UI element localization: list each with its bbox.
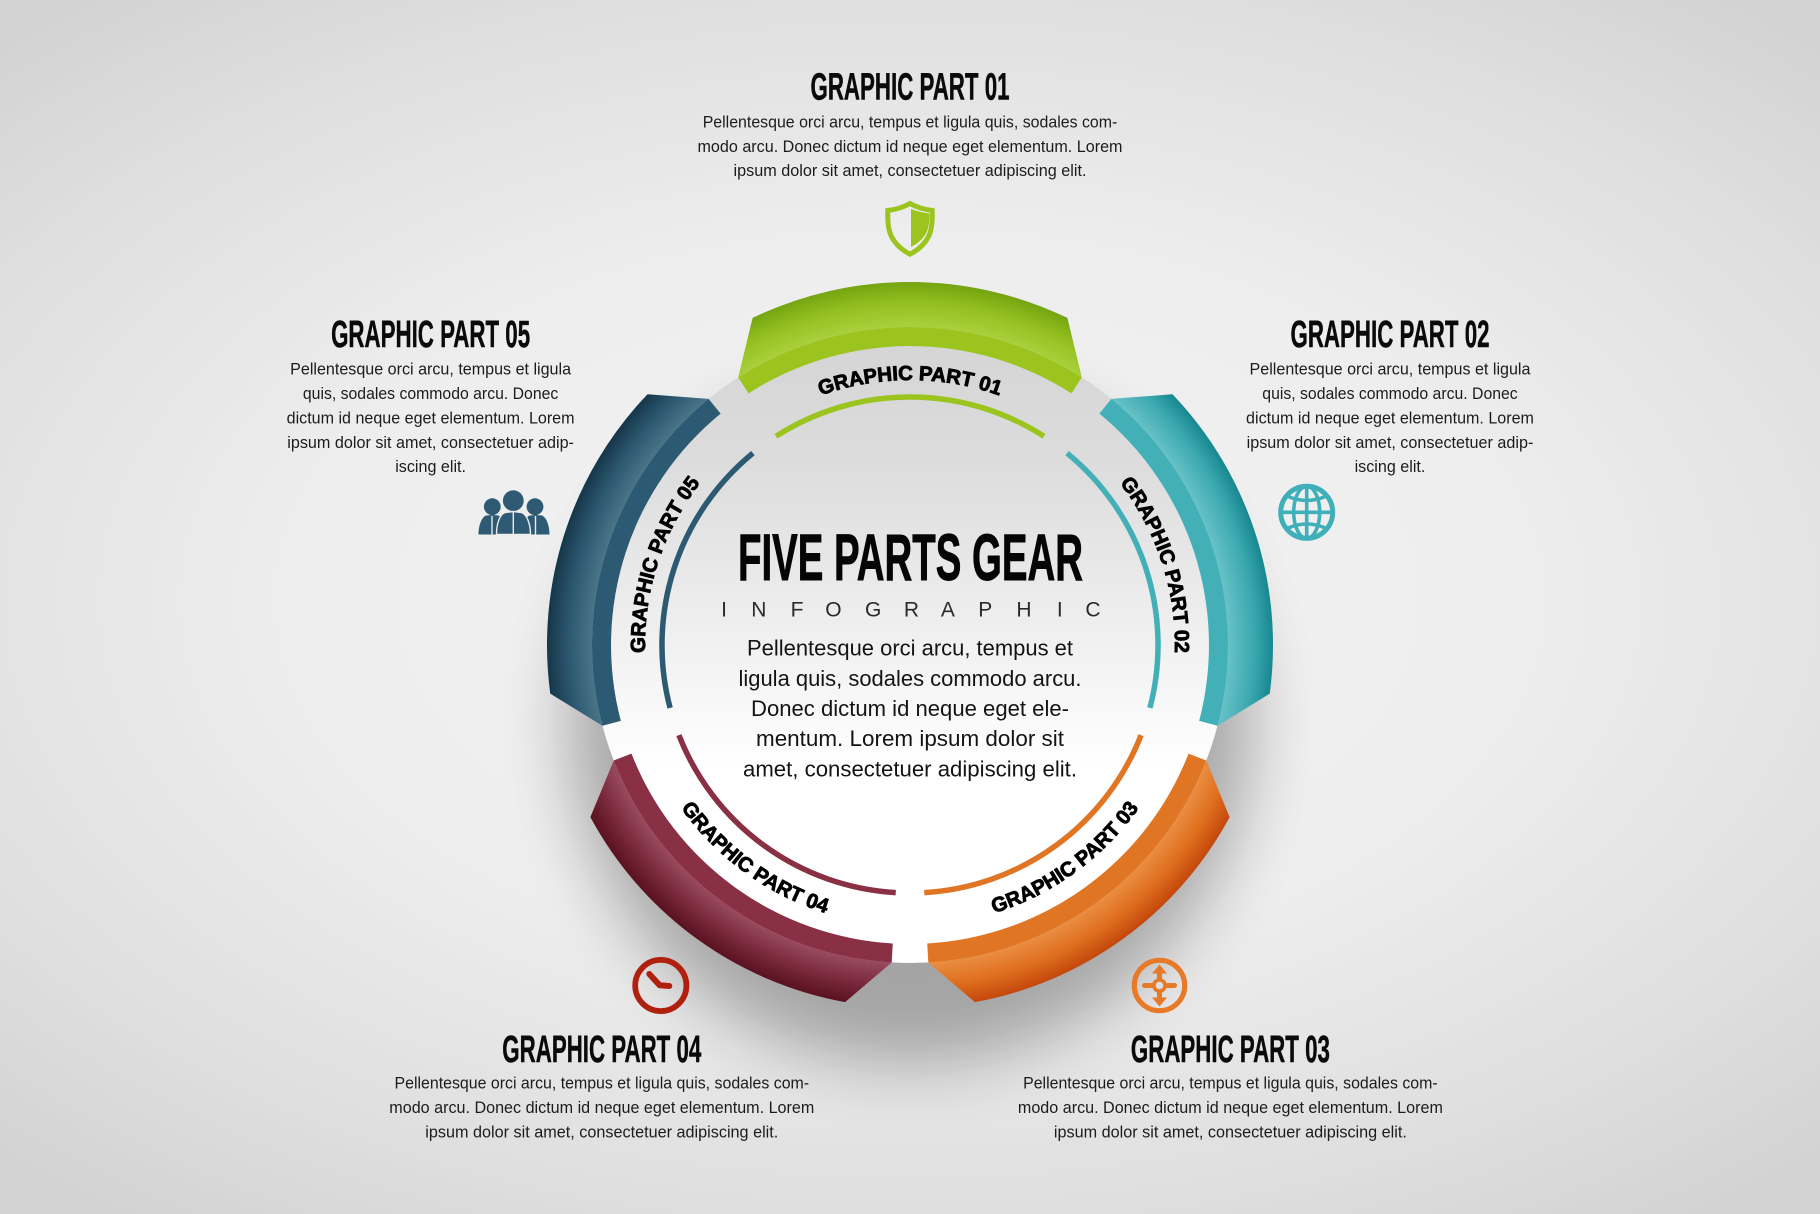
text block: modo arcu. Donec dictum id neque eget elementum. Lorem [698,138,1122,156]
inner arc: green [776,397,1044,436]
panel: part 05 [287,314,575,476]
segment: part 05 navy [512,369,724,731]
text block: modo arcu. Donec dictum id neque eget elementum. Lorem [389,1099,814,1117]
panel: part 01 [698,67,1122,180]
segment: part 02 teal [1096,369,1308,731]
text block: ipsum dolor sit amet, consectetuer adipiscing elit. [425,1124,778,1142]
curved label: part 04: GRAPHIC PART 04 [683,802,829,914]
curved label: part 05: GRAPHIC PART 05 [630,475,699,652]
heading: GRAPHIC PART 01 [810,67,1010,109]
text block [1018,1075,1443,1142]
inner arc: navy [633,441,753,708]
text block: Pellentesque orci arcu, tempus et ligula [1250,361,1531,379]
text block: ipsum dolor sit amet, consectetuer adipiscing elit. [1054,1124,1407,1142]
panel: part 04 [389,1029,814,1142]
icon: clock [635,960,686,1011]
segment: part 01 green [738,282,1082,393]
center description: ligula quis, sodales commodo arcu. [738,666,1082,691]
text block: quis, sodales commodo arcu. Donec [1262,385,1518,403]
text block: dictum id neque eget elementum. Lorem [287,409,575,427]
text block: quis, sodales commodo arcu. Donec [303,385,558,403]
inner arc: teal [1067,441,1187,708]
curved label: part 02: GRAPHIC PART 02 [1122,477,1190,652]
center description: Donec dictum id neque eget ele- [751,696,1069,721]
icon: shield [888,204,932,254]
text block: dictum id neque eget elementum. Lorem [1246,409,1534,427]
text block: Pellentesque orci arcu, tempus et ligula quis, sodales com- [394,1075,809,1093]
heading: GRAPHIC PART 02 [1290,314,1490,356]
curved label: part 03: GRAPHIC PART 03 [992,801,1138,912]
disc drop shadow [570,382,1250,1062]
text block [389,1075,814,1142]
text block: ipsum dolor sit amet, consectetuer adip- [287,434,574,452]
heading: GRAPHIC PART 03 [1131,1029,1330,1071]
text block: Pellentesque orci arcu, tempus et ligula quis, sodales com- [703,113,1117,131]
center description: mentum. Lorem ipsum dolor sit [756,726,1064,751]
icon: people [478,490,550,534]
text block [698,113,1122,180]
panel: part 02 [1246,314,1534,476]
text block: ipsum dolor sit amet, consectetuer adip- [1247,434,1533,452]
text block: Pellentesque orci arcu, tempus et ligula quis, sodales com- [1023,1075,1438,1093]
panel: part 03 [1018,1029,1443,1142]
heading: GRAPHIC PART 04 [502,1029,701,1071]
text block [287,361,575,476]
text block: modo arcu. Donec dictum id neque eget elementum. Lorem [1018,1099,1443,1117]
segment: part 03 orange [919,748,1262,1040]
center description: amet, consectetuer adipiscing elit. [743,756,1077,781]
icon: globe [1281,486,1333,538]
text block: ipsum dolor sit amet, consectetuer adipiscing elit. [734,162,1086,180]
center description [738,636,1082,781]
text block: Pellentesque orci arcu, tempus et ligula [290,361,572,379]
icon: compass [1134,960,1185,1011]
inner arc: maroon [656,735,896,924]
subtitle: INFOGRAPHIC [721,598,1101,621]
inner arc: orange [924,735,1164,924]
text block [1246,361,1534,476]
heading: GRAPHIC PART 05 [331,314,530,356]
segment: part 04 maroon [558,748,901,1040]
main title: FIVE PARTS GEAR [738,520,1083,594]
text block: iscing elit. [1355,458,1425,476]
text block: iscing elit. [395,458,466,476]
curved label: part 01: GRAPHIC PART 01 [818,365,1001,396]
center description: Pellentesque orci arcu, tempus et [747,636,1073,661]
central disc [592,327,1228,963]
